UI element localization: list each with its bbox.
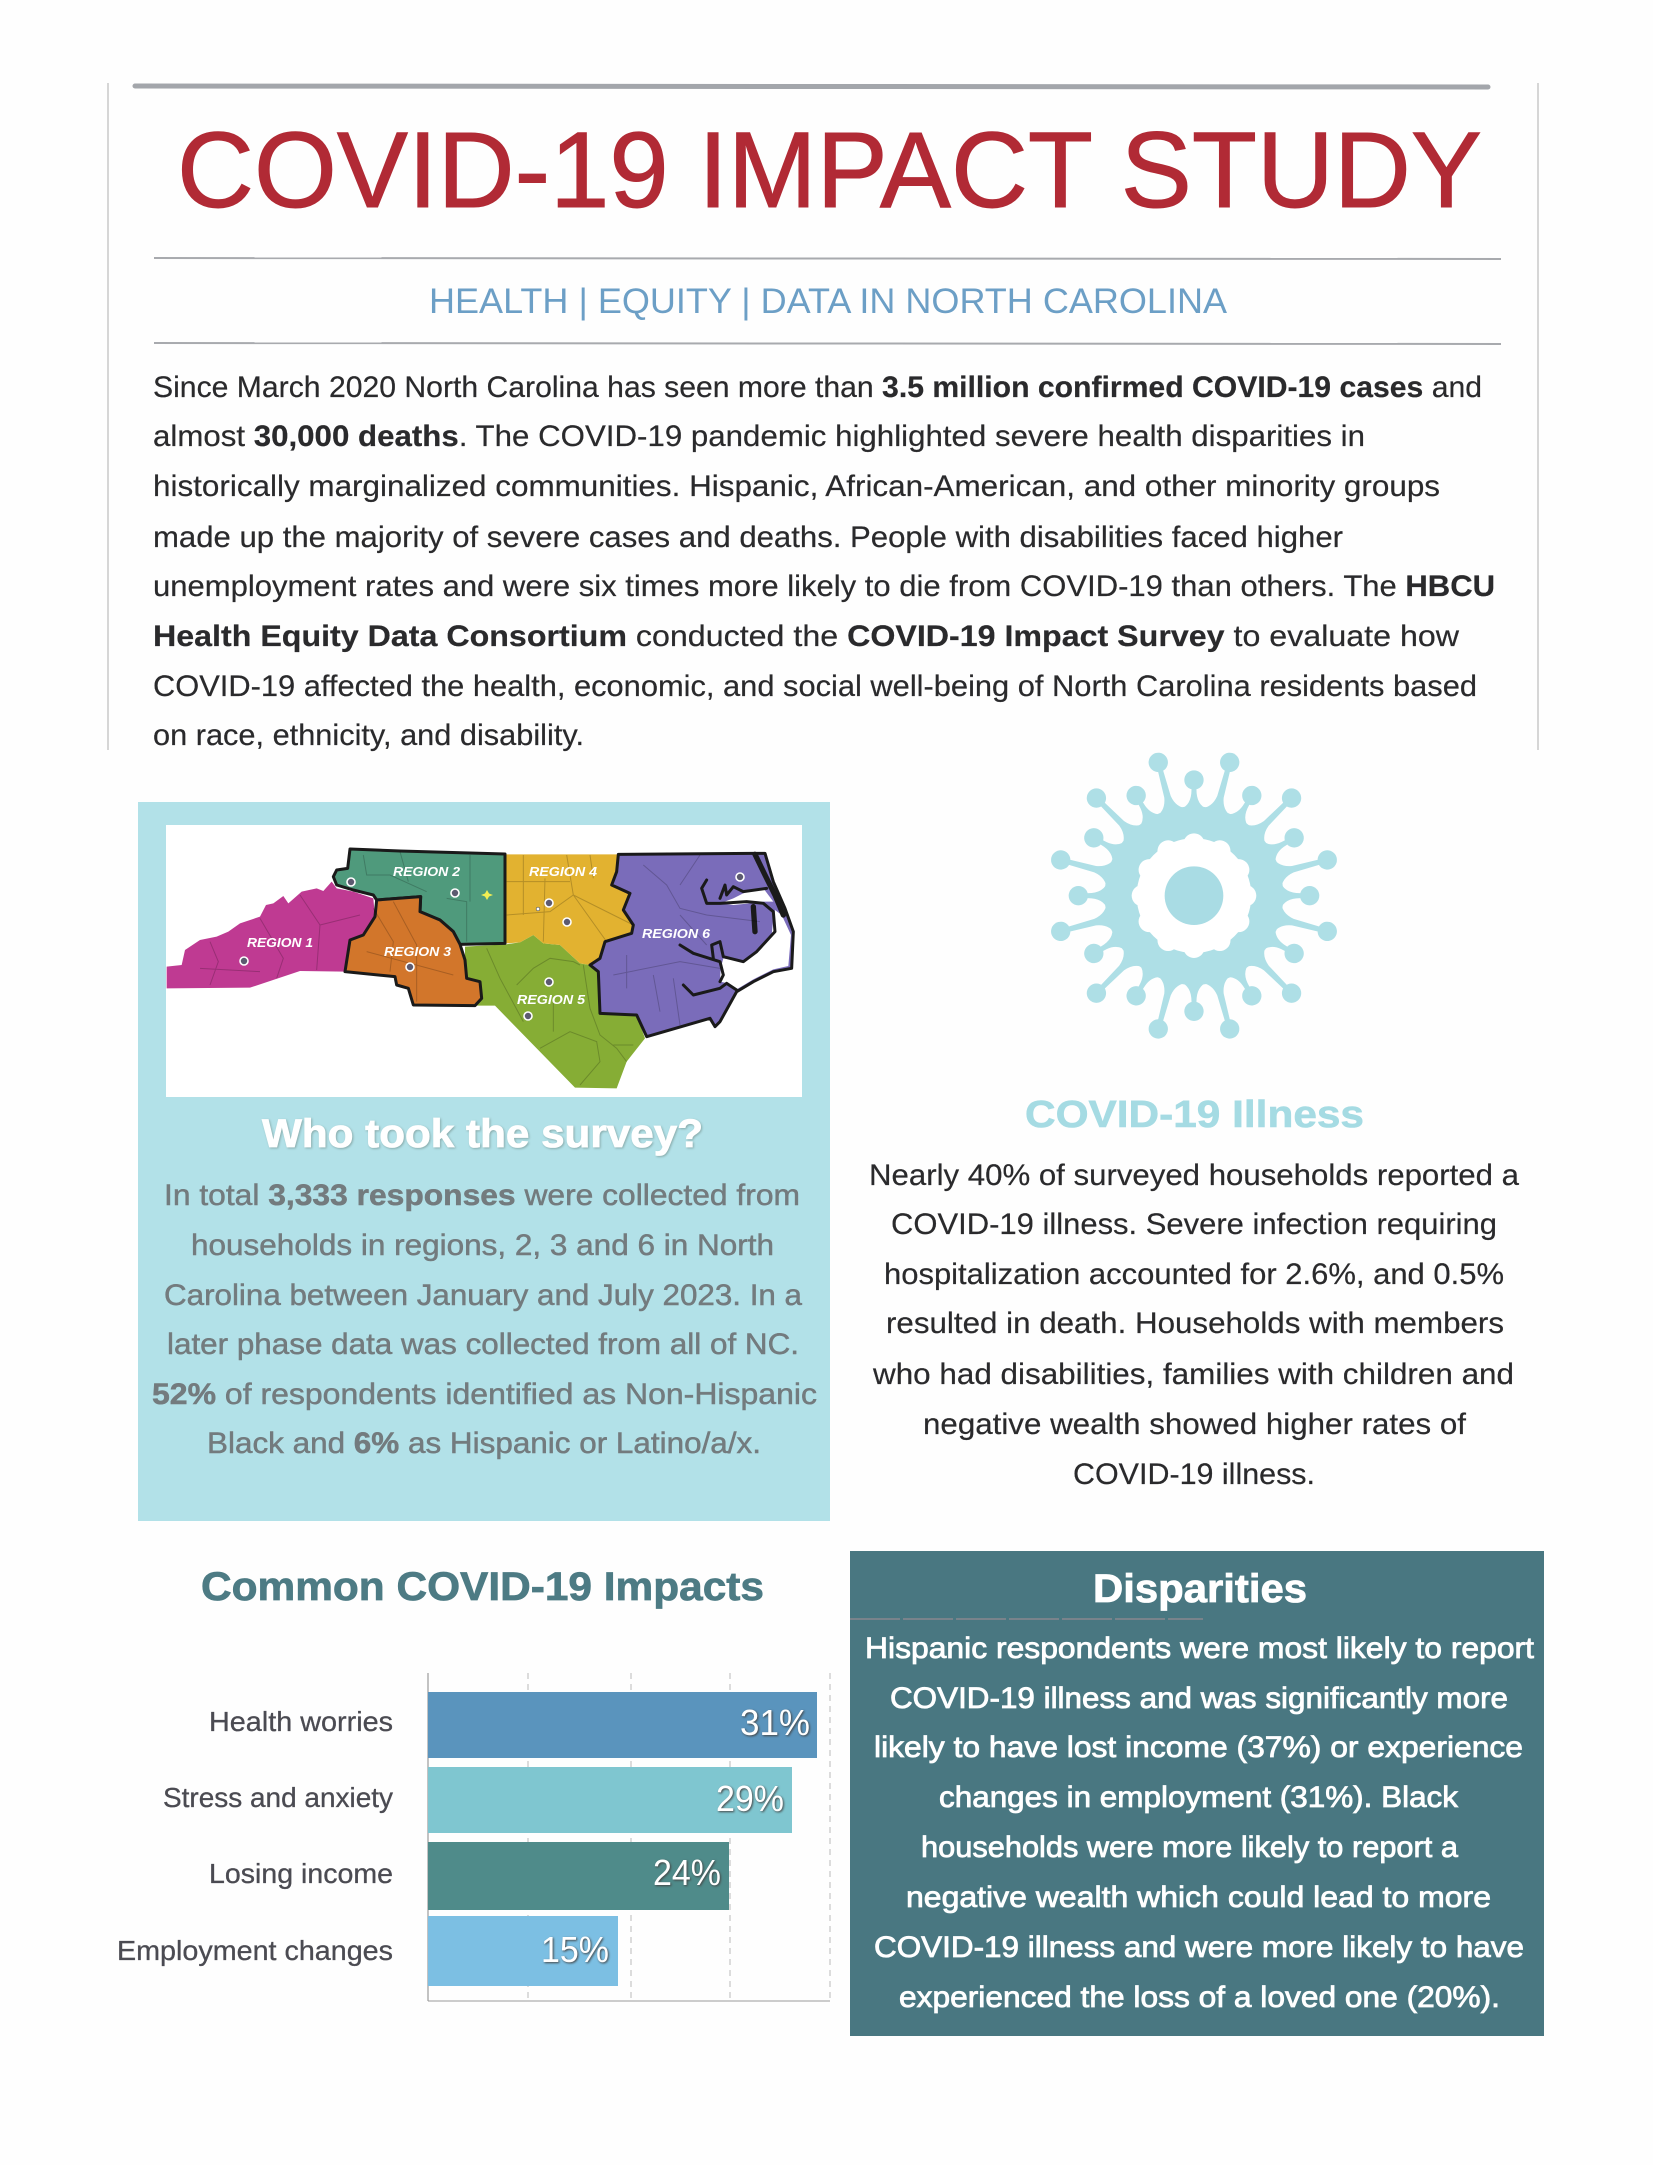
heading: common impacts: Common COVID-19 Impacts (201, 1565, 764, 1609)
map of North Carolina regions (167, 849, 793, 1088)
illness text block: Nearly 40% of surveyed households reported a (869, 1159, 1519, 1192)
panel: disparities (850, 1551, 1544, 2036)
survey description: households in regions, 2, 3 and 6 in North (191, 1229, 774, 1262)
survey description: Black and 6% as Hispanic or Latino/a/x. (207, 1427, 761, 1460)
survey description: later phase data was collected from all of NC. (167, 1328, 799, 1361)
region labels: REGION 4 (529, 864, 598, 879)
survey description: Carolina between January and July 2023. In a (164, 1279, 802, 1312)
disparities text block: households were more likely to report a (921, 1831, 1458, 1864)
illness text block: COVID-19 illness. Severe infection requiring (891, 1208, 1497, 1241)
illness text block: hospitalization accounted for 2.6%, and 0.5% (884, 1258, 1504, 1291)
disparities text block: COVID-19 illness and was significantly more (890, 1682, 1508, 1715)
heading: disparities: Disparities (1093, 1567, 1307, 1611)
bar: employment changes: Employment changes (117, 1935, 393, 1966)
coastal waters (680, 854, 791, 995)
bar chart (117, 1673, 830, 2001)
region labels: REGION 1 (247, 935, 313, 950)
region labels: REGION 2 (393, 864, 461, 879)
intro text block: made up the majority of severe cases and deaths. People with disabilities faced higher (153, 521, 1343, 554)
illness text block: negative wealth showed higher rates of (923, 1408, 1467, 1441)
illness text block: resulted in death. Households with members (886, 1307, 1504, 1340)
bar: losing income: Losing income (209, 1858, 393, 1889)
bar: stress and anxiety (163, 1767, 792, 1833)
bar: health worries: Health worries (209, 1706, 393, 1737)
disparities text block: negative wealth which could lead to more (906, 1881, 1491, 1914)
title: COVID-19 IMPACT STUDY (177, 109, 1482, 230)
disparities text block: Hispanic respondents were most likely to report (865, 1632, 1535, 1665)
panel: who took the survey (138, 802, 830, 1521)
survey description (152, 1179, 817, 1460)
bar: stress and anxiety: Stress and anxiety (163, 1782, 393, 1813)
region 3 (345, 897, 482, 1006)
disparities text block: changes in employment (31%). Black (939, 1781, 1459, 1814)
survey description: In total 3,333 responses were collected from (164, 1179, 800, 1212)
county lines (200, 852, 760, 1085)
region 1 (167, 882, 375, 988)
intro text block: Since March 2020 North Carolina has seen more than 3.5 million confirmed COVID-19 cases and (153, 371, 1482, 404)
intro text block: COVID-19 affected the health, economic, and social well-being of North Carolina residents based (153, 670, 1477, 703)
illness text block: who had disabilities, families with children and (872, 1358, 1514, 1391)
region labels: REGION 6 (642, 926, 711, 941)
intro text block: Health Equity Data Consortium conducted the COVID-19 Impact Survey to evaluate how (153, 620, 1459, 653)
bar: health worries (209, 1692, 817, 1758)
heading: COVID-19 illness: COVID-19 Illness (1025, 1094, 1364, 1136)
illness text block (869, 1159, 1519, 1491)
intro text block: unemployment rates and were six times more likely to die from COVID-19 than others. The HBCU (153, 570, 1495, 603)
region labels (247, 864, 711, 1007)
intro text block: historically marginalized communities. Hispanic, African-American, and other minority groups (153, 470, 1440, 503)
bar: health worries: 31% (740, 1702, 810, 1743)
bar: stress and anxiety: 29% (716, 1778, 784, 1819)
survey description: 52% of respondents identified as Non-Hispanic (152, 1378, 817, 1411)
bar: losing income (209, 1842, 729, 1910)
region 6 (590, 853, 793, 1037)
heading: who took the survey: Who took the survey? (262, 1112, 703, 1156)
subtitle: HEALTH | EQUITY | DATA IN NORTH CAROLINA (429, 282, 1228, 321)
region 4 (506, 854, 633, 965)
region labels: REGION 5 (517, 992, 586, 1007)
disparities text block: likely to have lost income (37%) or experience (874, 1731, 1523, 1764)
region 5 (465, 935, 645, 1088)
intro text block (153, 371, 1495, 752)
icon: virus (1047, 748, 1341, 1043)
disparities text block: COVID-19 illness and were more likely to have (874, 1931, 1524, 1964)
bar: losing income: 24% (653, 1852, 721, 1893)
disparities text block (865, 1632, 1535, 2014)
disparities text block: experienced the loss of a loved one (20%). (899, 1981, 1500, 2014)
illness text block: COVID-19 illness. (1073, 1458, 1315, 1491)
bar: employment changes: 15% (541, 1929, 609, 1970)
intro text block: on race, ethnicity, and disability. (153, 719, 584, 752)
intro text block: almost 30,000 deaths . The COVID-19 pandemic highlighted severe health disparities in (153, 420, 1365, 453)
county seats (240, 873, 744, 1020)
region 2 (333, 849, 505, 944)
region labels: REGION 3 (384, 944, 452, 959)
bar: employment changes (117, 1916, 618, 1986)
